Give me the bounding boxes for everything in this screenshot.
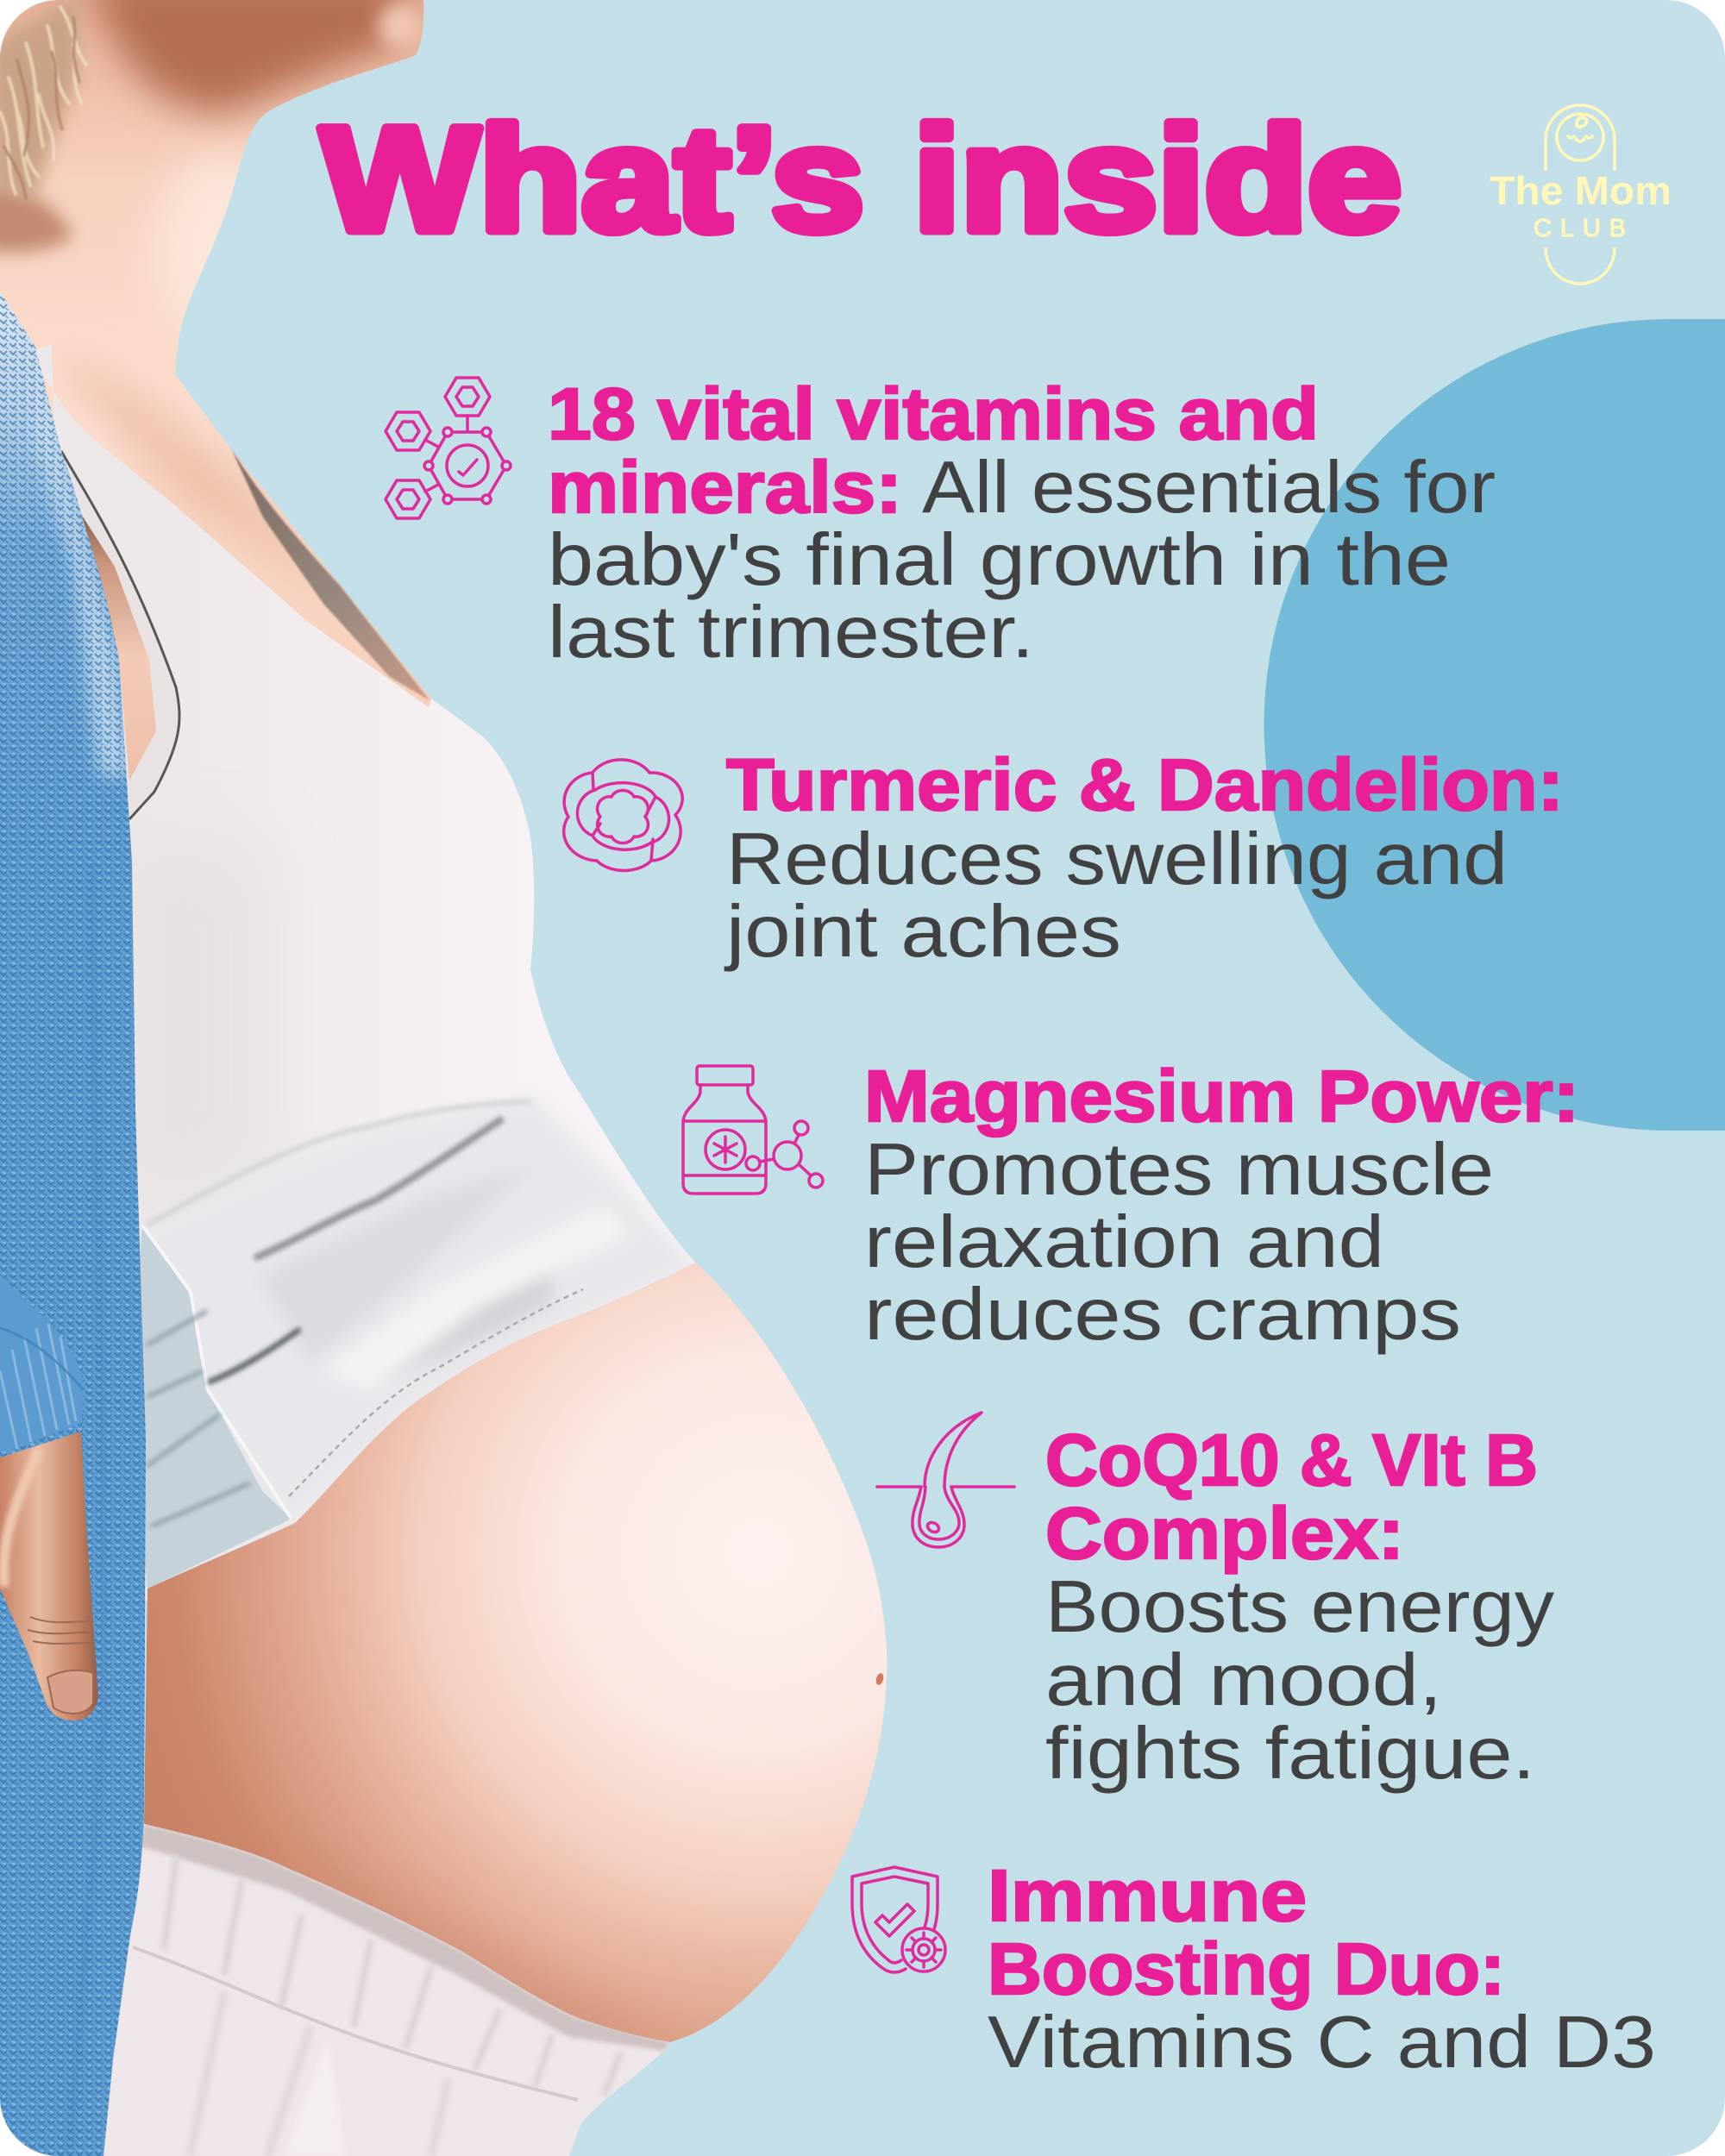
item 3: magnesium power: relaxation and (864, 1201, 1384, 1283)
item 5: immune boosting duo (852, 1855, 1656, 2084)
item 3: magnesium power (683, 1056, 1579, 1356)
shadow strip along chest (231, 448, 430, 700)
bare belly (144, 1263, 887, 2044)
item 4: coq10 and vitamin b complex: Complex: (1045, 1493, 1404, 1574)
item 2: turmeric and dandelion: Turmeric & Dandelion: (726, 744, 1564, 825)
photo: pregnant woman in profile (0, 0, 887, 2156)
hand on back (0, 1423, 104, 1725)
item 5: immune boosting duo: Boosting Duo: (988, 1928, 1505, 2009)
blue knit cardigan (0, 285, 155, 2156)
item 5: immune boosting duo: Vitamins C and D3 (988, 2002, 1656, 2084)
icon: shield with check and gear (852, 1867, 945, 1972)
item 5: immune boosting duo: Immune (988, 1855, 1307, 1936)
linen trousers (86, 1811, 690, 2156)
title: inside (913, 97, 1402, 262)
logo capsule top with baby face (1546, 105, 1615, 284)
item 1: vitamins and minerals (386, 373, 1496, 674)
item 4: coq10 and vitamin b complex: fights fatigue. (1045, 1713, 1535, 1795)
item 1: vitamins and minerals: 18 vital vitamins and (548, 373, 1319, 454)
item 3: magnesium power: reduces cramps (864, 1274, 1461, 1356)
item 3: magnesium power: Magnesium Power: (864, 1056, 1579, 1137)
hair wisps (0, 0, 86, 198)
item 4: coq10 and vitamin b complex: and mood, (1045, 1639, 1442, 1721)
item 2: turmeric and dandelion: Reduces swelling and (726, 818, 1508, 900)
icon: supplement bottle with molecule (683, 1066, 823, 1194)
logo: The Mom Club: The Mom (1490, 168, 1672, 213)
cardigan sleeve cuff (0, 1275, 84, 1452)
navel (876, 1673, 883, 1685)
item 4: coq10 and vitamin b complex (877, 1413, 1555, 1795)
item 1: vitamins and minerals: last trimester. (548, 592, 1034, 674)
decorative blue circle (1264, 319, 1725, 1131)
fingernail (47, 1670, 93, 1714)
logo: The Mom Club (1490, 105, 1672, 284)
icon: molecule check (386, 378, 511, 518)
icon: hair follicle (877, 1413, 1014, 1547)
item 2: turmeric and dandelion (564, 744, 1564, 973)
title: What’s (321, 97, 864, 262)
neck and chest skin (0, 0, 448, 733)
item 1: vitamins and minerals: baby's final growth in the (548, 519, 1451, 601)
item 4: coq10 and vitamin b complex: Boosts energy (1045, 1566, 1555, 1648)
item 2: turmeric and dandelion: joint aches (724, 891, 1121, 973)
logo: The Mom Club: CLUB (1534, 215, 1626, 242)
armhole opening (61, 451, 179, 819)
item 1: vitamins and minerals: minerals: (548, 447, 902, 528)
title (316, 117, 1402, 236)
item 1: vitamins and minerals: All essentials for (922, 447, 1496, 529)
item 3: magnesium power: Promotes muscle (864, 1129, 1494, 1211)
white t-shirt (36, 345, 695, 1604)
icon: flower (564, 760, 682, 870)
item 4: coq10 and vitamin b complex: CoQ10 & VIt B (1045, 1420, 1538, 1501)
